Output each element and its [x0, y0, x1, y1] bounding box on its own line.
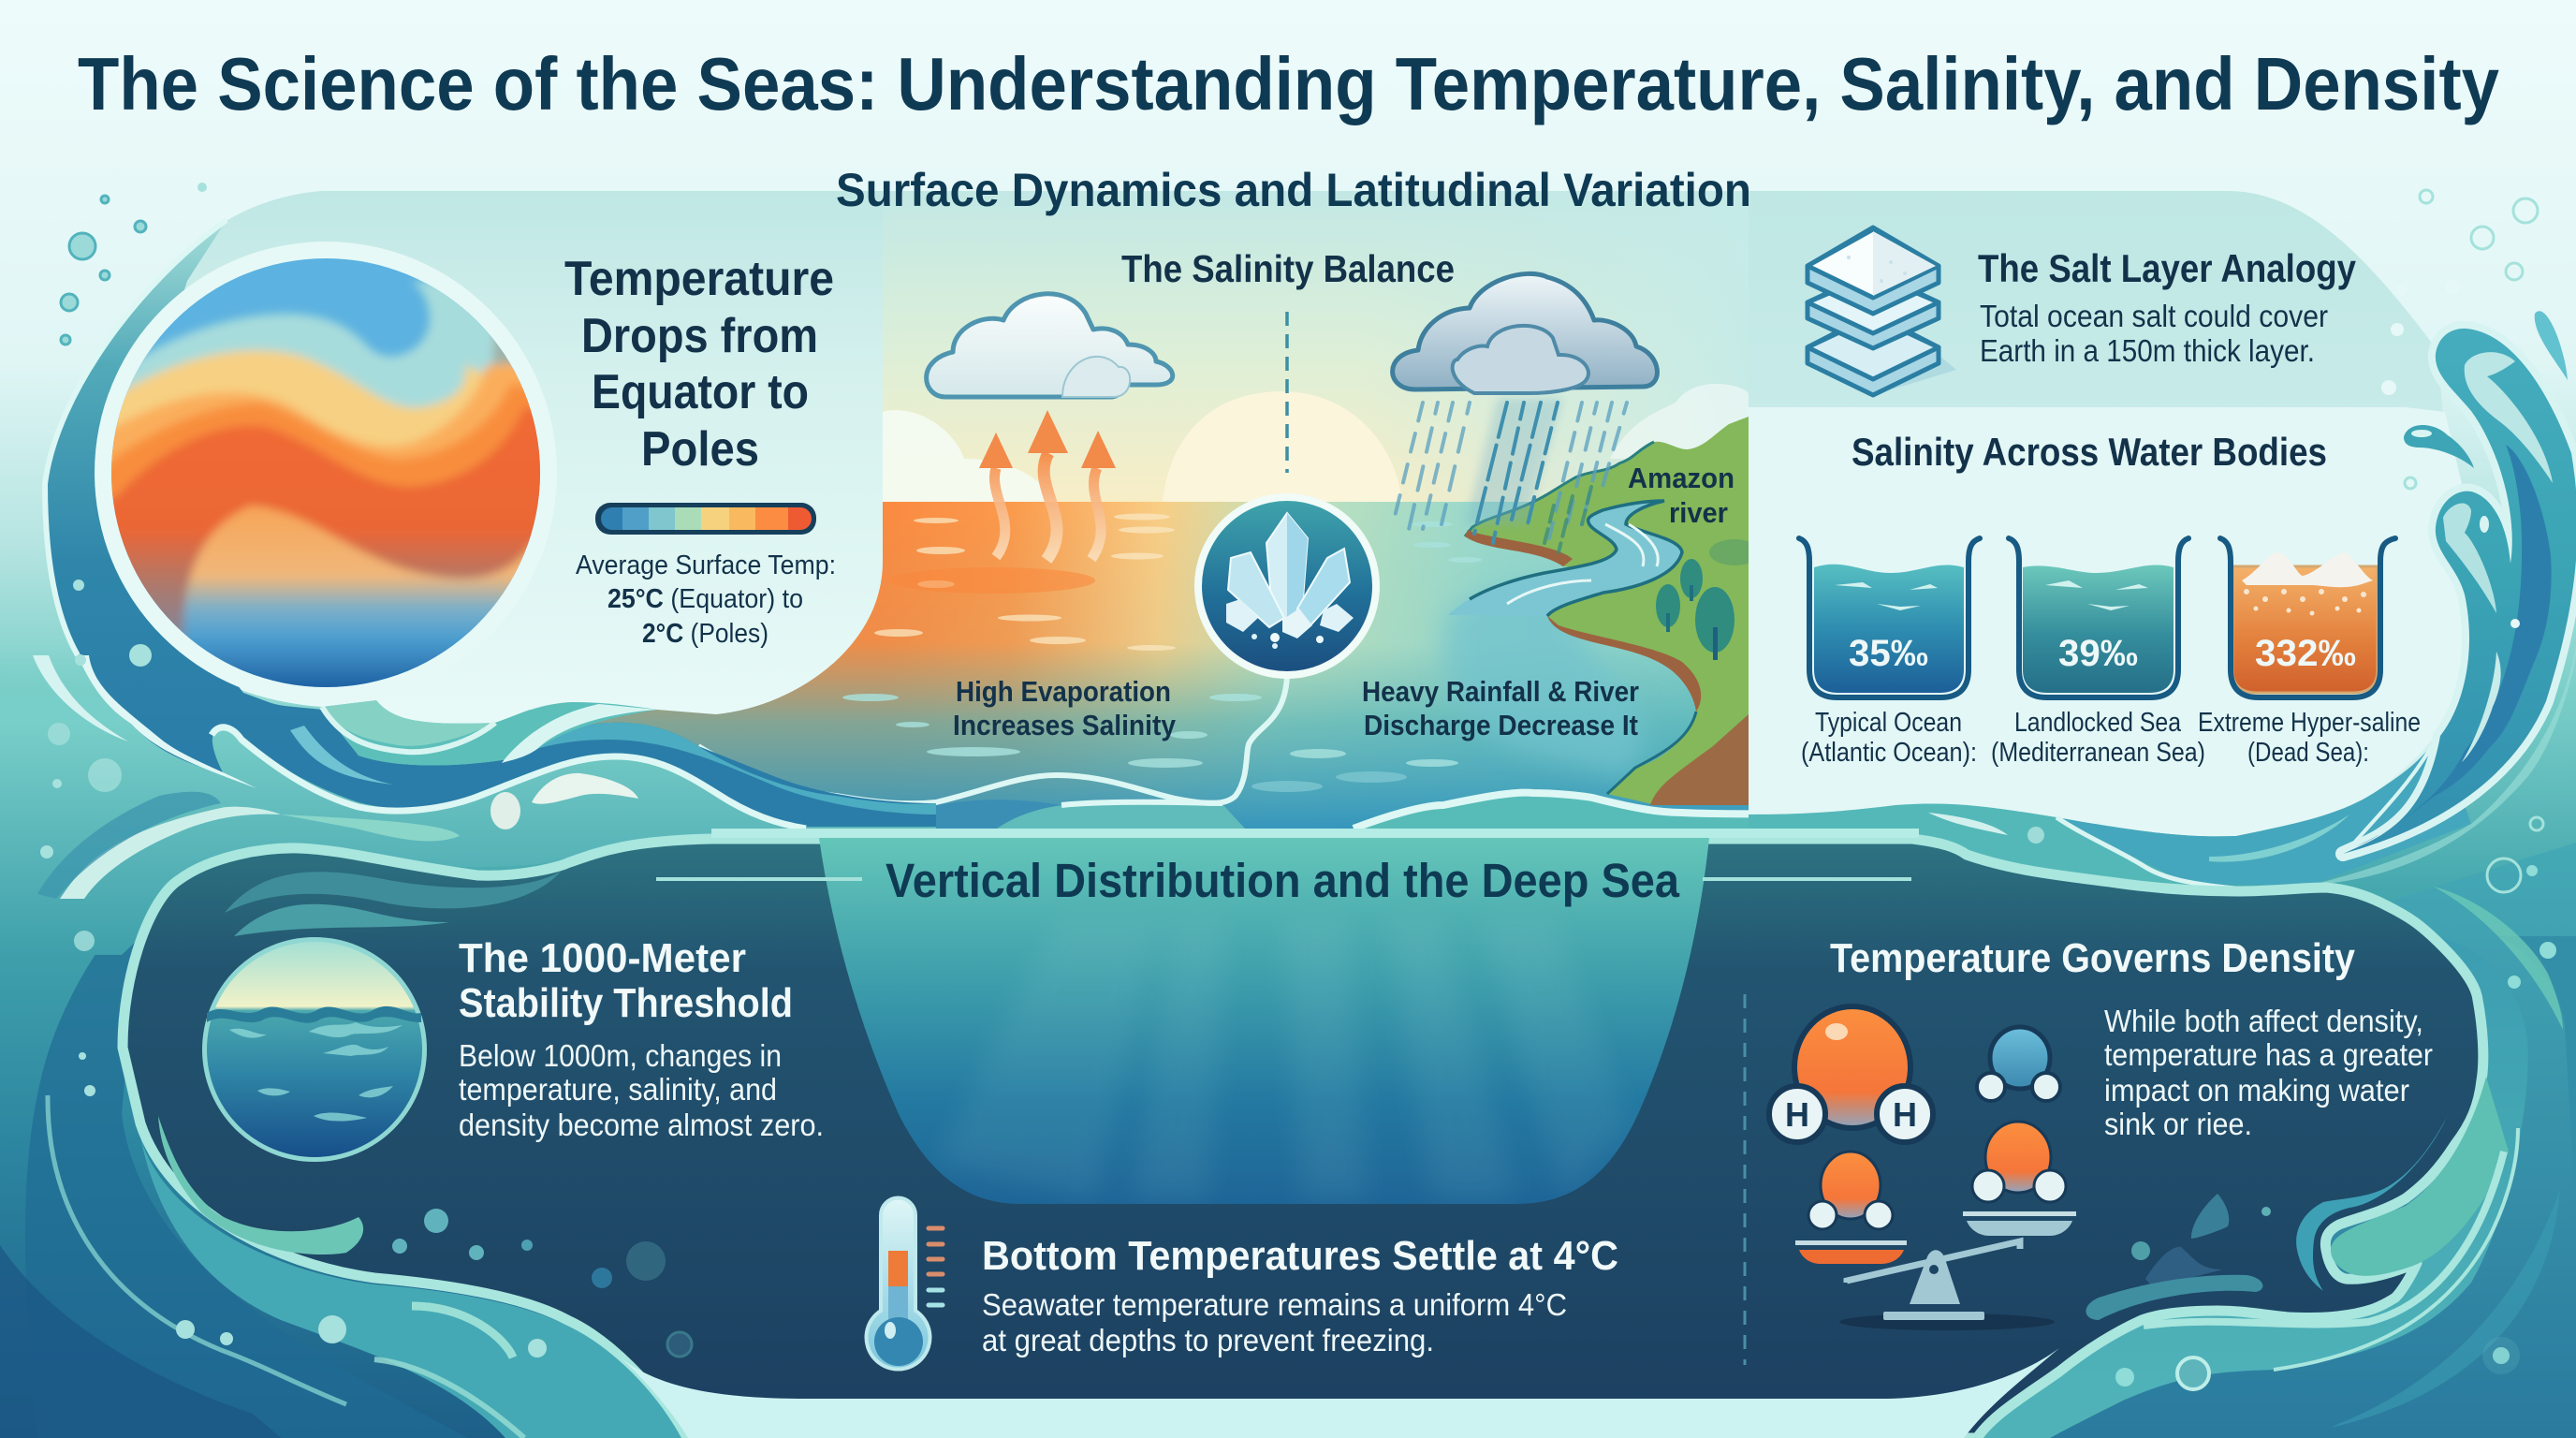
- label: extreme hyper-saline: (Dead Sea):: [2247, 738, 2369, 768]
- sun: [1163, 391, 1402, 502]
- heading: vertical distribution: Vertical Distribution and the Deep Sea: [886, 854, 1680, 907]
- background cloud haze left: [881, 410, 1058, 502]
- panel: temperature bubble: [94, 191, 883, 724]
- label: extreme hyper-saline: Extreme Hyper-saline: [2198, 708, 2421, 738]
- scene bottom: waves: [936, 793, 1749, 829]
- text: stability threshold: Stability Threshold: [459, 980, 793, 1026]
- text: stability threshold: temperature, salinity, and: [459, 1072, 777, 1107]
- heading: temperature drops: [564, 252, 834, 477]
- depth funnel: [819, 838, 1709, 1204]
- pale wave stripes right: [2144, 1128, 2518, 1370]
- panel: salinity balance scene: [590, 230, 1749, 829]
- icon: salt crystals: [1194, 493, 1380, 679]
- lower coast line: [1607, 712, 1696, 794]
- text: stability threshold: density become almost zero.: [459, 1108, 824, 1142]
- heading: temperature drops: Temperature: [564, 252, 834, 306]
- evaporation arrows: [979, 410, 1116, 560]
- text: bottom temperatures: at great depths to prevent freezing.: [982, 1323, 1434, 1357]
- heading: salinity across water bodies: Salinity Across Water Bodies: [1852, 430, 2327, 474]
- text: bottom temperatures: Bottom Temperatures Settle at 4°C: [982, 1233, 1618, 1279]
- globe: temperature map: [111, 258, 540, 687]
- right pan with molecule: [1963, 1122, 2076, 1236]
- lower right band beneath panel: [1749, 733, 2471, 889]
- label: landlocked sea: [1991, 708, 2205, 768]
- coast line: [1465, 442, 1654, 536]
- right splash wave: [2312, 311, 2576, 885]
- land: [1465, 417, 1749, 805]
- river highlights: [1507, 524, 1658, 604]
- label: landlocked sea: (Mediterranean Sea): [1991, 738, 2205, 768]
- label: heavy rainfall: Heavy Rainfall & River: [1362, 675, 1639, 708]
- lower-left background ribbons: [0, 899, 468, 1438]
- beaker: typical ocean: [1799, 538, 1980, 697]
- label: high evaporation: Increases Salinity: [953, 709, 1177, 741]
- teal tongue right: [2331, 1077, 2509, 1276]
- sea: [590, 502, 1696, 805]
- sea depth tint: [588, 586, 1749, 829]
- pale sea highlights: [37, 773, 638, 899]
- brown hill: [1650, 714, 1749, 805]
- text: salt layer analogy: Earth in a 150m thick layer.: [1980, 333, 2315, 368]
- river: [1448, 501, 1682, 616]
- light rays: [954, 938, 1616, 1193]
- icon: water depth porthole: [202, 937, 427, 1162]
- heading: temperature drops: Equator to: [592, 365, 809, 419]
- right cloud: [1393, 273, 1657, 393]
- left pan with molecule: [1795, 1152, 1907, 1264]
- beaker: landlocked sea: 39‰: [2058, 633, 2138, 674]
- lower-left wave beneath panel: [140, 1137, 681, 1438]
- trees: [1656, 559, 1734, 660]
- icon: small blue molecule: [1977, 1027, 2060, 1101]
- sphere ring: [95, 242, 557, 704]
- warm patch: [917, 567, 1095, 594]
- background cloud haze right: [1610, 384, 1749, 459]
- text: average surface temperature: [576, 550, 836, 649]
- label: amazon river: Amazon: [1628, 462, 1734, 494]
- sea foam: [842, 521, 1482, 792]
- text: average surface temperature: Average Surface Temp:: [576, 550, 836, 580]
- text: temperature governs density: While both affect density,: [2104, 1004, 2423, 1038]
- rain: [1393, 398, 1627, 552]
- icon: large water molecule: [1769, 1006, 1933, 1142]
- icon: large water molecule: H: [1893, 1095, 1917, 1134]
- beaker: dead sea: [2220, 538, 2395, 697]
- text: bottom temperatures: Seawater temperature remains a uniform 4°C: [982, 1287, 1567, 1322]
- icon: balance scale: [1795, 1122, 2076, 1330]
- beaker: landlocked sea: [2009, 538, 2188, 697]
- label: heavy rainfall: Discharge Decrease It: [1364, 709, 1638, 741]
- text: temperature governs density: sink or riee.: [2104, 1107, 2252, 1141]
- left cloud: [927, 294, 1173, 397]
- lower-left pale sea: [0, 646, 936, 955]
- wave crescent right: [2296, 1115, 2448, 1291]
- dim sea silhouette: [2086, 1194, 2271, 1320]
- label: high evaporation: High Evaporation: [956, 675, 1171, 708]
- heading rule right: [1703, 877, 1911, 881]
- text: average surface temperature: 2°C (Poles): [642, 619, 768, 649]
- heading: the salinity balance: The Salinity Balance: [1121, 247, 1455, 290]
- label: typical ocean: (Atlantic Ocean):: [1801, 738, 1977, 768]
- sky side fade: [1424, 258, 1749, 502]
- section heading: surface dynamics: Surface Dynamics and Latitudinal Variation: [836, 164, 1751, 216]
- text: average surface temperature: 25°C (Equator) to: [607, 584, 803, 614]
- text: bottom temperatures: [982, 1233, 1618, 1357]
- icon: salt layers: [1808, 227, 1956, 395]
- label: landlocked sea: Landlocked Sea: [2014, 708, 2182, 738]
- heading rule left: [656, 877, 862, 881]
- land shading patch: [1709, 539, 1749, 565]
- right side lower background: [1966, 843, 2576, 1438]
- heading: temperature drops: Drops from: [581, 309, 818, 363]
- text: temperature governs density: temperature has a greater: [2104, 1037, 2433, 1072]
- divider: density: [1743, 994, 1747, 1365]
- text: salt layer analogy: Total ocean salt could cover: [1980, 299, 2328, 333]
- left panel bubbles: [392, 1209, 692, 1357]
- white wave lines and salt connector: [698, 677, 1872, 829]
- top panel body: [94, 191, 2471, 824]
- teal tongue left: [158, 1116, 363, 1255]
- lower coast bank: [1547, 616, 1701, 712]
- beaker: dead sea: 332‰: [2255, 633, 2356, 674]
- icon: large water molecule: H: [1785, 1095, 1809, 1134]
- label: amazon river: river: [1669, 496, 1728, 529]
- estuary: [1443, 580, 1645, 777]
- temperature scale bar: [595, 503, 816, 535]
- text: stability threshold: [459, 935, 824, 1142]
- divider band over the deep sea: [711, 829, 1919, 838]
- label: high evaporation: [953, 675, 1177, 741]
- label: extreme hyper-saline: [2198, 708, 2421, 768]
- right lower panel: [1749, 407, 2471, 836]
- coast bank: [1465, 530, 1573, 566]
- text: stability threshold: The 1000-Meter: [459, 935, 746, 981]
- heading: temperature drops: Poles: [641, 422, 759, 477]
- text: stability threshold: Below 1000m, changes in: [459, 1038, 782, 1073]
- panel: deep sea: [123, 839, 2483, 1438]
- label: heavy rainfall: [1362, 675, 1639, 741]
- text: temperature governs density: [1830, 935, 2433, 1141]
- left swoosh wave: [33, 220, 936, 829]
- label: typical ocean: Typical Ocean: [1815, 708, 1962, 738]
- text: salt layer analogy: The Salt Layer Analogy: [1978, 246, 2357, 290]
- icon: thermometer: [867, 1198, 943, 1370]
- bottom light strip: [621, 1348, 2059, 1438]
- sky: [883, 230, 1664, 502]
- text: temperature governs density: Temperature Governs Density: [1830, 935, 2355, 981]
- label: typical ocean: [1801, 708, 1977, 768]
- sea highlights: [874, 513, 1176, 651]
- river banks: [1470, 501, 1682, 616]
- inner stripes top-left of deep panel: [225, 871, 562, 936]
- beaker: typical ocean: 35‰: [1849, 633, 1928, 674]
- text: temperature governs density: impact on making water: [2104, 1073, 2409, 1108]
- label: amazon river: [1628, 462, 1734, 529]
- divider: salinity scene: [1285, 312, 1289, 473]
- text: salt layer analogy: [1978, 246, 2357, 368]
- lower-right wave: [1975, 936, 2528, 1438]
